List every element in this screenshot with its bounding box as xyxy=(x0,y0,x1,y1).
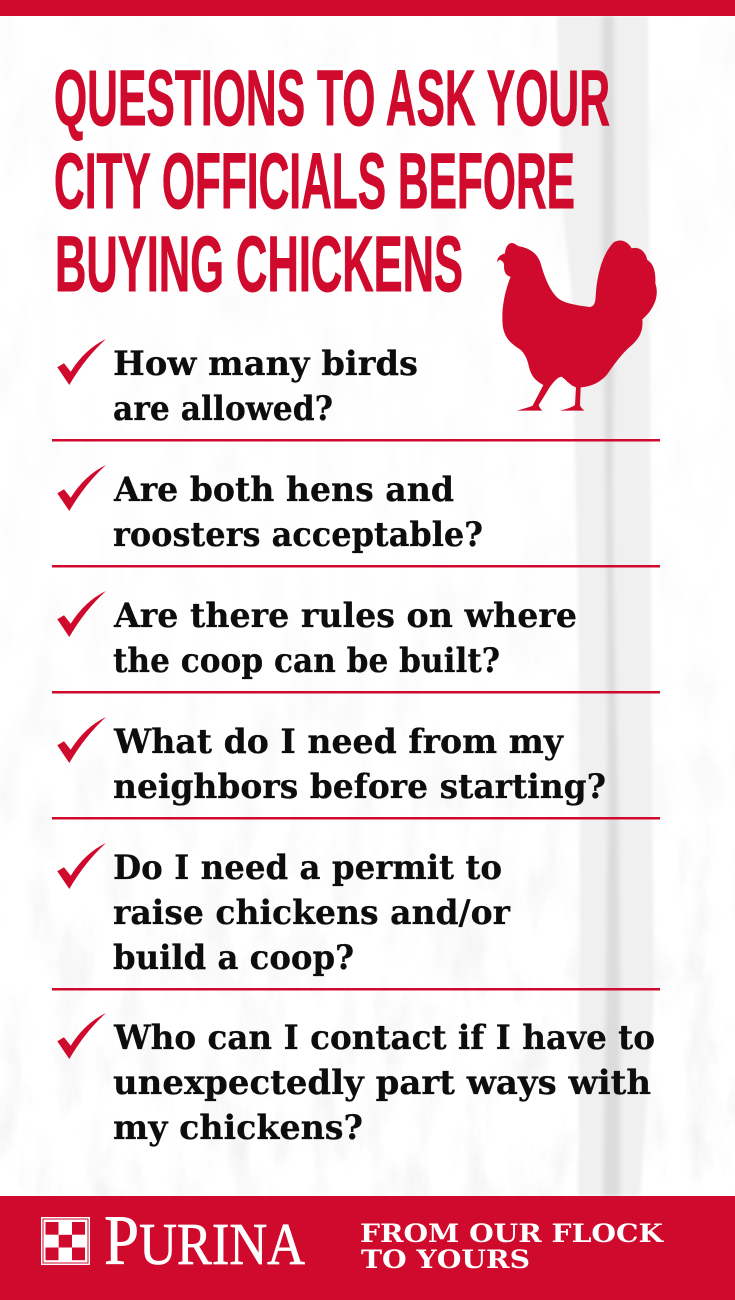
icon: check mark xyxy=(57,1013,106,1059)
footer band xyxy=(0,1196,735,1300)
question 5 xyxy=(57,843,510,977)
icon: Purina checkerboard logo xyxy=(41,1217,90,1265)
question 3 xyxy=(57,591,577,680)
tagline: FROM OUR FLOCK xyxy=(360,1219,664,1248)
divider 1 xyxy=(52,439,660,442)
divider 2 xyxy=(52,565,660,568)
divider 5 xyxy=(52,988,660,990)
question 2 xyxy=(57,465,483,554)
question 2: roosters acceptable? xyxy=(113,515,483,554)
question 3: Are there rules on where xyxy=(113,596,577,635)
tagline: TO YOURS xyxy=(361,1245,530,1274)
question 4 xyxy=(57,717,606,806)
question 4: What do I need from my xyxy=(113,722,565,761)
question 6 xyxy=(57,1013,655,1147)
question 5: build a coop? xyxy=(113,938,354,977)
icon: check mark xyxy=(57,843,106,889)
divider 4 xyxy=(52,817,660,820)
top red bar xyxy=(0,0,735,16)
icon: red hen silhouette xyxy=(497,240,657,411)
question 6: unexpectedly part ways with xyxy=(113,1063,651,1102)
question 3: the coop can be built? xyxy=(113,641,500,680)
icon: check mark xyxy=(57,465,106,511)
title xyxy=(54,53,610,308)
question 1 xyxy=(57,339,418,428)
question 5: raise chickens and/or xyxy=(113,893,510,932)
icon: check mark xyxy=(57,591,106,637)
question 2: Are both hens and xyxy=(113,470,454,509)
tagline xyxy=(360,1219,664,1274)
question 4: neighbors before starting? xyxy=(113,767,606,806)
divider 3 xyxy=(52,691,660,694)
icon: check mark xyxy=(57,339,106,385)
question 1: are allowed? xyxy=(113,389,333,428)
question 5: Do I need a permit to xyxy=(113,848,502,887)
question 6: Who can I contact if I have to xyxy=(113,1018,655,1057)
Purina wordmark: PURINA xyxy=(104,1202,305,1280)
question 1: How many birds xyxy=(113,344,418,383)
question 6: my chickens? xyxy=(113,1108,363,1147)
icon: check mark xyxy=(57,717,106,763)
